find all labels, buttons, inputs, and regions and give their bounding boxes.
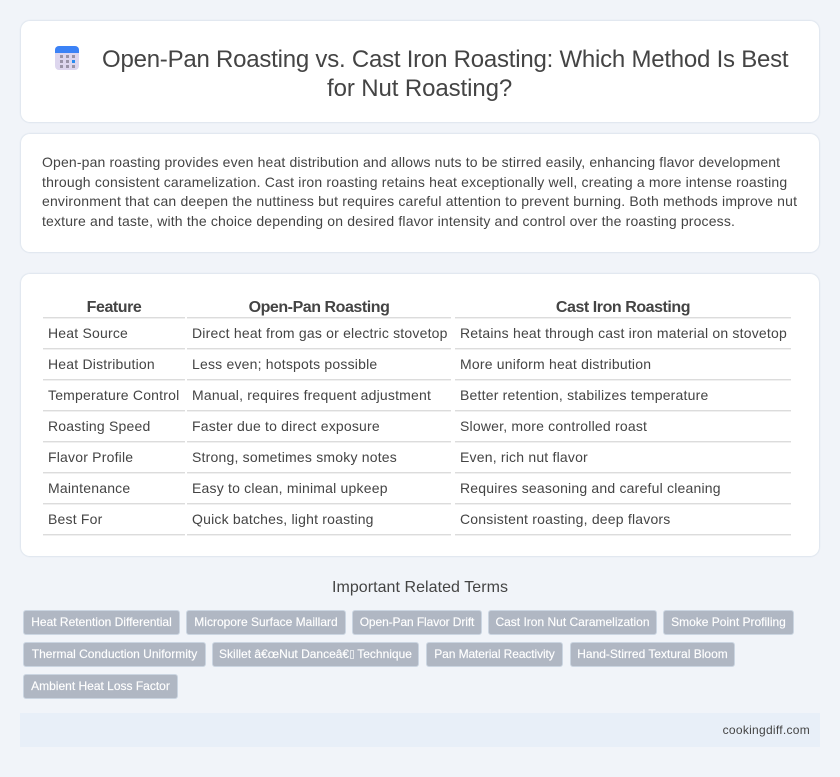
text block: description [42, 154, 797, 229]
row: heat source: Retains heat through cast iron material on stovetop [460, 325, 787, 341]
row: roasting speed: Faster due to direct exposure [192, 418, 380, 434]
tag group: related terms: Heat Retention Differential [31, 615, 172, 629]
tag group: related terms: Thermal Conduction Uniformity [32, 647, 197, 661]
row: flavor profile: Flavor Profile [48, 449, 133, 465]
tag group: related terms: Hand-Stirred Textural Bloom [577, 647, 728, 661]
text block: description: through consistent caramelization. Cast iron roasting retains heat exceptionally well, creating a more intense roasting [42, 174, 787, 190]
row: maintenance: Easy to clean, minimal upkeep [192, 480, 388, 496]
footer source: cookingdiff.com [723, 723, 810, 737]
table header: Feature [87, 299, 141, 316]
row: maintenance [48, 480, 721, 496]
tag group: related terms [23, 610, 794, 699]
row: maintenance: Maintenance [48, 480, 130, 496]
icon: calendar [55, 46, 79, 70]
row: best for [48, 511, 670, 527]
tag group: related terms: Smoke Point Profiling [671, 615, 786, 629]
heading: related terms: Important Related Terms [332, 579, 508, 596]
row: roasting speed [48, 418, 647, 434]
row: flavor profile [48, 449, 588, 465]
row: temperature control: Manual, requires frequent adjustment [192, 387, 431, 403]
table header: Cast Iron Roasting [556, 299, 690, 316]
row lines [43, 317, 791, 536]
row: roasting speed: Slower, more controlled roast [460, 418, 647, 434]
tag group: related terms: Open-Pan Flavor Drift [360, 615, 474, 629]
heading: for Nut Roasting? [327, 75, 512, 102]
row: heat distribution: Less even; hotspots possible [192, 356, 377, 372]
row: best for: Best For [48, 511, 103, 527]
heading [102, 46, 788, 102]
heading: Open-Pan Roasting vs. Cast Iron Roasting: Which Method Is Best [102, 46, 788, 73]
row: roasting speed: Roasting Speed [48, 418, 150, 434]
row: best for: Consistent roasting, deep flavors [460, 511, 670, 527]
row: heat distribution [48, 356, 651, 372]
row: best for: Quick batches, light roasting [192, 511, 374, 527]
text block: description: environment that can deepen the nuttiness but requires careful attention to prevent burning. Both methods improve nut [42, 193, 797, 209]
row: maintenance: Requires seasoning and careful cleaning [460, 480, 721, 496]
text block: description: Open-pan roasting provides even heat distribution and allows nuts to be stirred easily, enhancing flavor development [42, 154, 780, 170]
row: heat source [48, 325, 787, 341]
row: flavor profile: Strong, sometimes smoky notes [192, 449, 397, 465]
row: heat distribution: Heat Distribution [48, 356, 155, 372]
tag group: related terms: Ambient Heat Loss Factor [31, 679, 170, 693]
row: heat source: Direct heat from gas or electric stovetop [192, 325, 448, 341]
row: temperature control: Temperature Control [48, 387, 179, 403]
panel: comparison table [20, 273, 820, 557]
row: heat source: Heat Source [48, 325, 128, 341]
table header: Open-Pan Roasting [249, 299, 389, 316]
row: temperature control [48, 387, 708, 403]
panel: title [20, 20, 820, 123]
footer [20, 713, 820, 747]
tag group: related terms: Pan Material Reactivity [434, 647, 555, 661]
tag group: related terms: Cast Iron Nut Caramelization [495, 615, 650, 629]
row: temperature control: Better retention, stabilizes temperature [460, 387, 708, 403]
row: flavor profile: Even, rich nut flavor [460, 449, 588, 465]
text block: description: texture and taste, with the choice depending on desired flavor intensity and control over the roasting process. [42, 213, 735, 229]
row: heat distribution: More uniform heat distribution [460, 356, 651, 372]
panel: description [20, 133, 820, 253]
tag group: related terms: Micropore Surface Maillard [194, 615, 338, 629]
tag group: related terms: Skillet â€œNut Danceâ€ Technique [219, 647, 412, 661]
table header [87, 299, 690, 316]
